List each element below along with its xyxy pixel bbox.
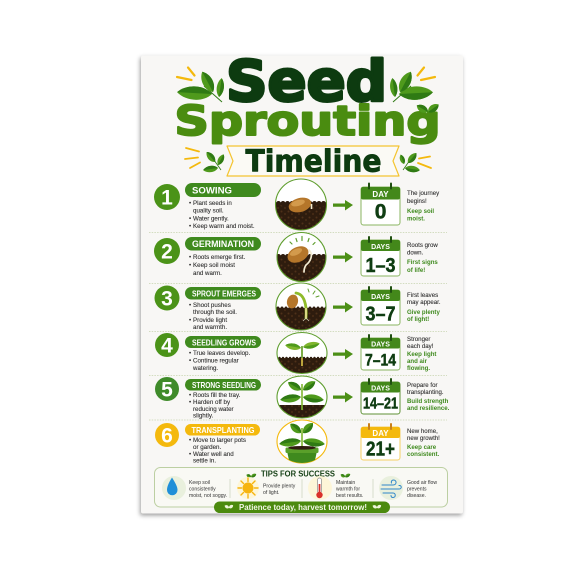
bullet list: watering.: [192, 365, 218, 372]
heading pill: strong seedling: STRONG SEEDLING: [192, 381, 256, 390]
bullet list: •: [189, 254, 191, 261]
step number 5: [155, 377, 179, 402]
calendar: days 7-14: 7–14: [365, 352, 397, 370]
arrow: [333, 252, 353, 262]
caption: [407, 382, 450, 412]
row 2: germination: [154, 232, 438, 287]
step number 1: [154, 184, 180, 210]
illustration: seedling: [276, 332, 328, 374]
illustration: potted plant: [277, 420, 327, 465]
caption: First leaves: [407, 292, 438, 299]
bullet list: True leaves develop.: [193, 350, 250, 357]
bullet list: •: [189, 437, 191, 444]
step number 4: [155, 333, 179, 358]
caption: Stronger: [407, 336, 430, 343]
bullet list: •: [189, 223, 191, 230]
bullet list: through the soil.: [193, 309, 237, 316]
tip: water: [162, 476, 227, 500]
tip: warmth: best results.: [336, 493, 363, 499]
tip: light: [237, 477, 296, 499]
row 4: seedling grows: [155, 332, 436, 376]
caption: Build strength: [407, 398, 449, 405]
heading pill: germination: GERMINATION: [192, 239, 254, 249]
caption: New home,: [407, 428, 438, 435]
heading pill: strong seedling: [185, 379, 261, 390]
bullet list: •: [189, 216, 191, 222]
calendar: day 21+: [361, 424, 400, 460]
title banner: [227, 146, 399, 176]
caption: each day!: [407, 343, 434, 350]
bullet list: Plant seeds in: [193, 200, 232, 207]
bullet list: [189, 437, 246, 464]
bullet list: reducing water: [193, 406, 234, 413]
heading pill: transplanting: TRANSPLANTING: [192, 425, 254, 435]
caption: flowing.: [407, 365, 430, 372]
step number 6: [155, 423, 179, 448]
tip: water: consistently: [189, 486, 216, 492]
calendar: days 3-7: 3–7: [366, 304, 396, 326]
bullet list: Water well and: [193, 451, 234, 458]
step number 4: 4: [161, 334, 173, 358]
row 1: sowing: [154, 179, 440, 234]
bullet list: [189, 392, 241, 420]
bullet list: •: [189, 392, 191, 399]
calendar: days 14-21: 14–21: [363, 396, 398, 412]
tip: air flow: disease.: [407, 493, 426, 499]
bullet list: settle in.: [193, 458, 216, 464]
calendar: days 3-7: [361, 287, 400, 326]
caption: [407, 190, 440, 222]
bullet list: •: [189, 399, 191, 406]
bullet list: •: [189, 350, 191, 357]
caption: of life!: [407, 267, 425, 274]
sprig left of Timeline: [185, 148, 226, 173]
calendar: days 14-21: DAYS: [371, 386, 390, 392]
caption: Keep care: [407, 444, 437, 451]
decorative leaves right of Seed: [389, 68, 435, 102]
sprig right of Timeline: [398, 151, 431, 173]
bullet list: •: [189, 262, 191, 269]
heading pill: sprout emerges: [185, 287, 261, 300]
caption: The journey: [407, 190, 440, 197]
calendar: day 21+: DAY: [372, 429, 389, 438]
caption: [407, 292, 441, 323]
bullet list: Roots emerge first.: [193, 254, 246, 261]
bullet list: quality soil.: [193, 208, 224, 215]
caption: may appear.: [407, 299, 441, 306]
heading pill: sowing: SOWING: [192, 186, 232, 196]
bullet list: •: [189, 302, 191, 309]
bullet list: Provide light: [193, 317, 227, 324]
title: [174, 50, 440, 180]
row 3: sprout emerges: [154, 283, 441, 334]
poster background: [141, 56, 463, 514]
caption: [407, 428, 440, 458]
calendar: day 21+: 21+: [366, 438, 395, 460]
illustration: germinating seed: [276, 232, 327, 282]
arrow: [333, 302, 353, 312]
caption: new growth!: [407, 435, 440, 442]
tip: water: Keep soil: [189, 480, 210, 486]
calendar: days 1-3: DAYS: [371, 244, 390, 251]
tip: air flow: Good air flow: [407, 480, 437, 486]
calendar: day 0: DAY: [372, 190, 389, 199]
caption: consistent.: [407, 451, 439, 458]
decorative leaves left of Seed: [177, 68, 225, 102]
step number 6: 6: [161, 424, 173, 448]
tip: warmth: Maintain: [336, 480, 355, 486]
step number 3: [154, 286, 180, 310]
bullet list: Move to larger pots: [193, 437, 246, 444]
caption: Roots grow: [407, 242, 438, 249]
tip: air flow: [379, 476, 437, 500]
bullet list: Keep soil moist: [193, 262, 235, 269]
step number 2: 2: [161, 240, 173, 264]
tip: warmth: [308, 476, 363, 500]
bullet list: Water gently.: [193, 216, 229, 222]
tips heading: TIPS FOR SUCCESS: [261, 470, 336, 478]
title word: Seed: Seed: [226, 50, 387, 114]
calendar: days 14-21: [361, 379, 400, 414]
heading pill: seedling grows: SEEDLING GROWS: [192, 338, 256, 347]
bullet list: slightly.: [193, 412, 213, 420]
heading pill: seedling grows: [185, 336, 261, 348]
heading pill: germination: [185, 237, 261, 250]
sprout on letter g: [415, 102, 441, 115]
tip: water: moist, not soggy.: [189, 493, 227, 499]
calendar: days 1-3: [361, 237, 400, 277]
heading pill: sprout emerges: SPROUT EMERGES: [192, 290, 256, 298]
illustration: seed in soil: [274, 178, 328, 230]
illustration: sprout emerging: [275, 282, 327, 330]
title word: Timeline: Timeline: [246, 144, 382, 180]
bullet list: •: [189, 317, 191, 324]
arrow: [333, 200, 353, 210]
calendar: days 3-7: DAYS: [371, 294, 390, 301]
title word: Sprouting: Sprouting: [174, 97, 440, 145]
illustration: strong seedling: [276, 376, 328, 418]
calendar: days 7-14: [361, 335, 400, 370]
caption: Give plenty: [407, 309, 440, 316]
row 6: transplanting: [155, 420, 440, 465]
bullet list: •: [189, 200, 191, 207]
bullet list: •: [189, 451, 191, 458]
caption: down.: [407, 250, 424, 256]
calendar: days 1-3: 1–3: [366, 254, 396, 277]
step number 1: 1: [161, 186, 173, 210]
bullet list: Harden off by: [193, 399, 231, 406]
bullet list: Continue regular: [193, 358, 239, 364]
bullet list: •: [189, 358, 191, 364]
step number 2: [154, 238, 180, 264]
tip: light: Provide plenty: [263, 484, 296, 490]
caption: Keep light: [407, 351, 436, 358]
caption: moist.: [407, 216, 425, 222]
bullet list: [189, 302, 237, 331]
footer banner: Patience today, harvest tomorrow!: [239, 503, 367, 512]
bullet list: and warm.: [193, 270, 222, 277]
calendar: day 0: [361, 184, 400, 225]
bullet list: [189, 350, 250, 372]
caption: and air: [407, 358, 428, 365]
bullet list: [189, 254, 246, 277]
caption: and resilience.: [407, 405, 450, 412]
step number 3: 3: [161, 288, 173, 310]
caption: First signs: [407, 259, 438, 266]
bullet list: Roots fill the tray.: [193, 392, 241, 399]
tip: air flow: prevents: [407, 486, 427, 492]
tip: light: of light.: [263, 490, 279, 496]
row 5: strong seedling: [155, 376, 450, 420]
calendar: days 7-14: DAYS: [371, 342, 390, 348]
heading pill: sowing: [185, 183, 261, 197]
bullet list: [189, 200, 255, 230]
bullet list: Keep warm and moist.: [193, 223, 255, 230]
caption: of light!: [407, 316, 429, 323]
bullet list: or garden.: [193, 444, 221, 451]
bullet list: Shoot pushes: [193, 302, 231, 309]
step number 5: 5: [161, 378, 173, 402]
caption: Prepare for: [407, 382, 437, 389]
caption: begins!: [407, 198, 427, 205]
arrow: [333, 349, 353, 360]
caption: transplanting.: [407, 389, 444, 396]
caption: [407, 336, 436, 372]
panel: tips for success: [154, 468, 448, 507]
footer banner: [214, 502, 390, 513]
bullet list: and warmth.: [193, 324, 227, 331]
tip: warmth: warmth for: [336, 486, 360, 492]
arrow: [333, 392, 353, 402]
calendar: day 0: 0: [375, 200, 386, 224]
caption: Keep soil: [407, 208, 434, 215]
caption: [407, 242, 438, 274]
